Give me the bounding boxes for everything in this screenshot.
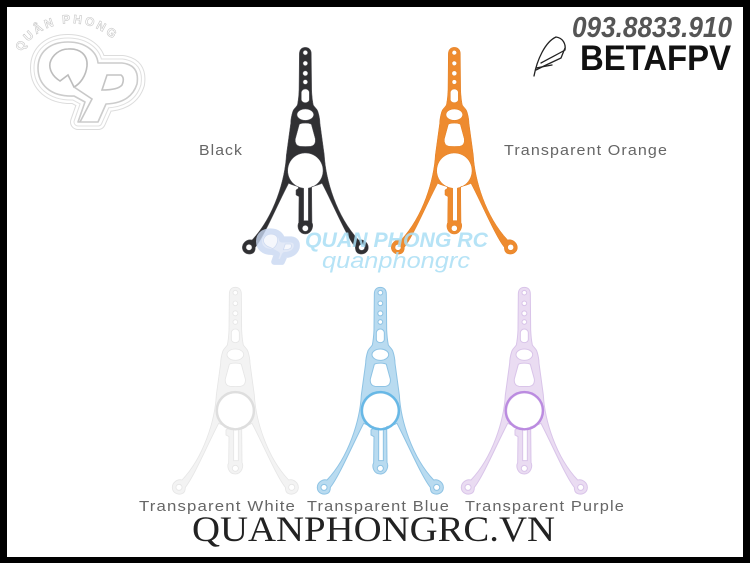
holder: transparent purple bbox=[461, 287, 587, 494]
phone number: 093.8833.910 bbox=[572, 12, 732, 44]
holder: transparent orange bbox=[391, 47, 517, 254]
label: Transparent White: Transparent White bbox=[139, 499, 296, 515]
label: Black: Black bbox=[199, 143, 243, 159]
icon: feather brand mark bbox=[534, 37, 565, 76]
watermark: small QP logo bbox=[259, 231, 297, 262]
watermark: quanphongrc: quanphongrc bbox=[322, 248, 470, 273]
brand name BETAFPV: BETAFPV bbox=[580, 39, 732, 78]
label: Transparent Orange: Transparent Orange bbox=[504, 143, 668, 159]
logo: Quan Phong QP: QUÂN PHONG bbox=[16, 14, 116, 50]
holder: transparent white bbox=[172, 287, 298, 494]
label: Transparent Blue: Transparent Blue bbox=[307, 499, 450, 515]
holder: black bbox=[242, 47, 368, 254]
logo: Quan Phong QP bbox=[16, 14, 146, 130]
label: Transparent Purple: Transparent Purple bbox=[465, 499, 625, 515]
watermark: QUAN PHONG RC: QUAN PHONG RC bbox=[305, 229, 489, 252]
holder: transparent blue bbox=[317, 287, 443, 494]
website title: QUANPHONGRC.VN bbox=[192, 509, 555, 549]
